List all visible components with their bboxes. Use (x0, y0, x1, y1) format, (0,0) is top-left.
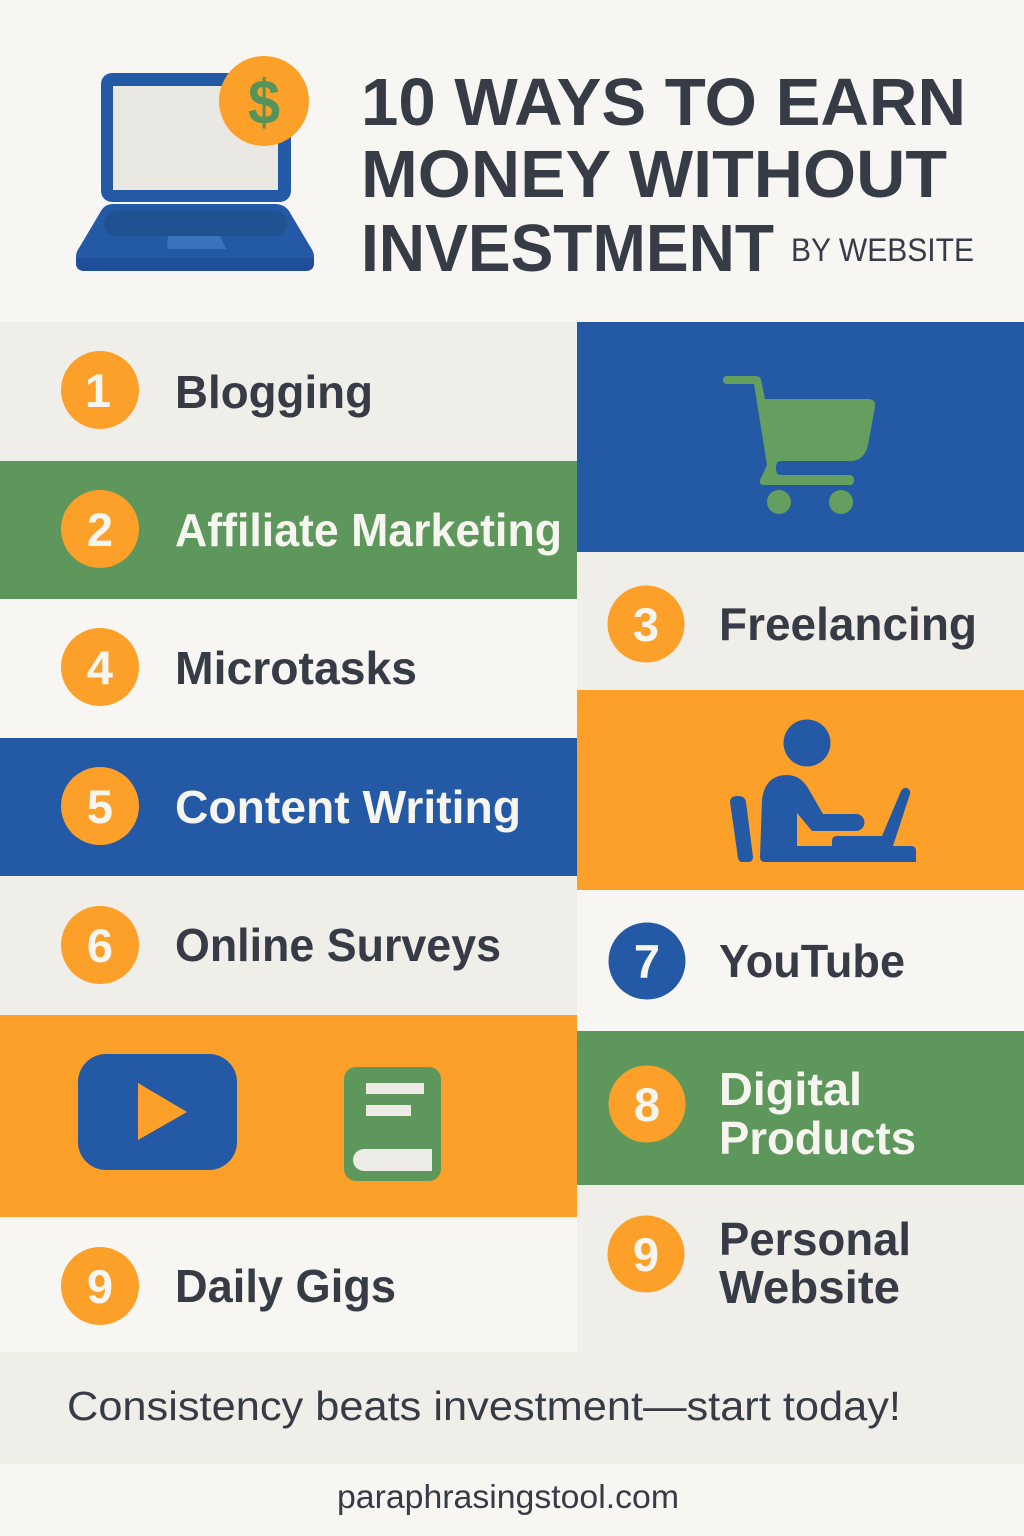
dollar coin (219, 56, 309, 146)
title: 10 WAYS TO EARN (361, 65, 966, 140)
row: 8 Digital Products: Products (719, 1112, 916, 1164)
icon: person working on laptop (730, 720, 916, 862)
row: 8 Digital Products: Digital (719, 1063, 862, 1115)
tagline band (0, 1352, 1024, 1464)
panel: video and ebook icons (0, 1015, 577, 1217)
row: 7 YouTube: 7 (634, 935, 660, 988)
row: 9 Daily Gigs: Daily Gigs (175, 1260, 396, 1312)
row: 2 Affiliate Marketing: Affiliate Marketing (175, 504, 562, 556)
row: 9 Personal Website: Personal (719, 1213, 911, 1265)
footer website: paraphrasingstool.com (337, 1478, 679, 1515)
panel: shopping cart icon (577, 322, 1024, 552)
tagline band: Consistency beats investment—start today! (67, 1383, 901, 1429)
row: 9 Personal Website: 9 (633, 1228, 659, 1281)
dollar coin: $ (248, 68, 280, 138)
row: 9 Personal Website: Website (719, 1261, 900, 1313)
row: 5 Content Writing (0, 738, 577, 876)
row: 6 Online Surveys (0, 876, 577, 1015)
row: 7 YouTube: YouTube (719, 935, 905, 987)
row: 4 Microtasks (0, 599, 577, 738)
row: 6 Online Surveys: 6 (87, 919, 113, 972)
row: 3 Freelancing: 3 (633, 598, 659, 651)
laptop base (76, 204, 314, 271)
row: 4 Microtasks: 4 (87, 641, 113, 694)
row: 1 Blogging: 1 (85, 364, 111, 417)
row: 9 Daily Gigs (0, 1217, 577, 1352)
footer website (0, 1464, 1024, 1536)
title: BY WEBSITE (791, 232, 974, 268)
icon: book (344, 1067, 441, 1181)
row: 2 Affiliate Marketing: 2 (87, 503, 113, 556)
row: 7 YouTube (577, 890, 1024, 1031)
row: 9 Daily Gigs: 9 (87, 1260, 113, 1313)
row: 3 Freelancing (577, 552, 1024, 690)
title: MONEY WITHOUT (361, 137, 947, 212)
row: 1 Blogging: Blogging (175, 366, 373, 418)
row: 6 Online Surveys: Online Surveys (175, 919, 501, 971)
row: 5 Content Writing: Content Writing (175, 781, 521, 833)
header icon: laptop with dollar coin (76, 56, 314, 271)
row: 4 Microtasks: Microtasks (175, 642, 417, 694)
icon: shopping cart (723, 376, 875, 514)
laptop screen (101, 73, 291, 202)
row: 2 Affiliate Marketing (0, 461, 577, 599)
panel: person at laptop icon (577, 690, 1024, 890)
title: INVESTMENT (361, 211, 774, 286)
row: 8 Digital Products: 8 (634, 1078, 660, 1131)
title (361, 65, 974, 286)
row: 1 Blogging (0, 322, 577, 461)
row: 8 Digital Products (577, 1031, 1024, 1185)
icon: video play button (78, 1054, 237, 1170)
row: 3 Freelancing: Freelancing (719, 598, 977, 650)
row: 9 Personal Website (577, 1185, 1024, 1352)
row: 5 Content Writing: 5 (87, 780, 113, 833)
